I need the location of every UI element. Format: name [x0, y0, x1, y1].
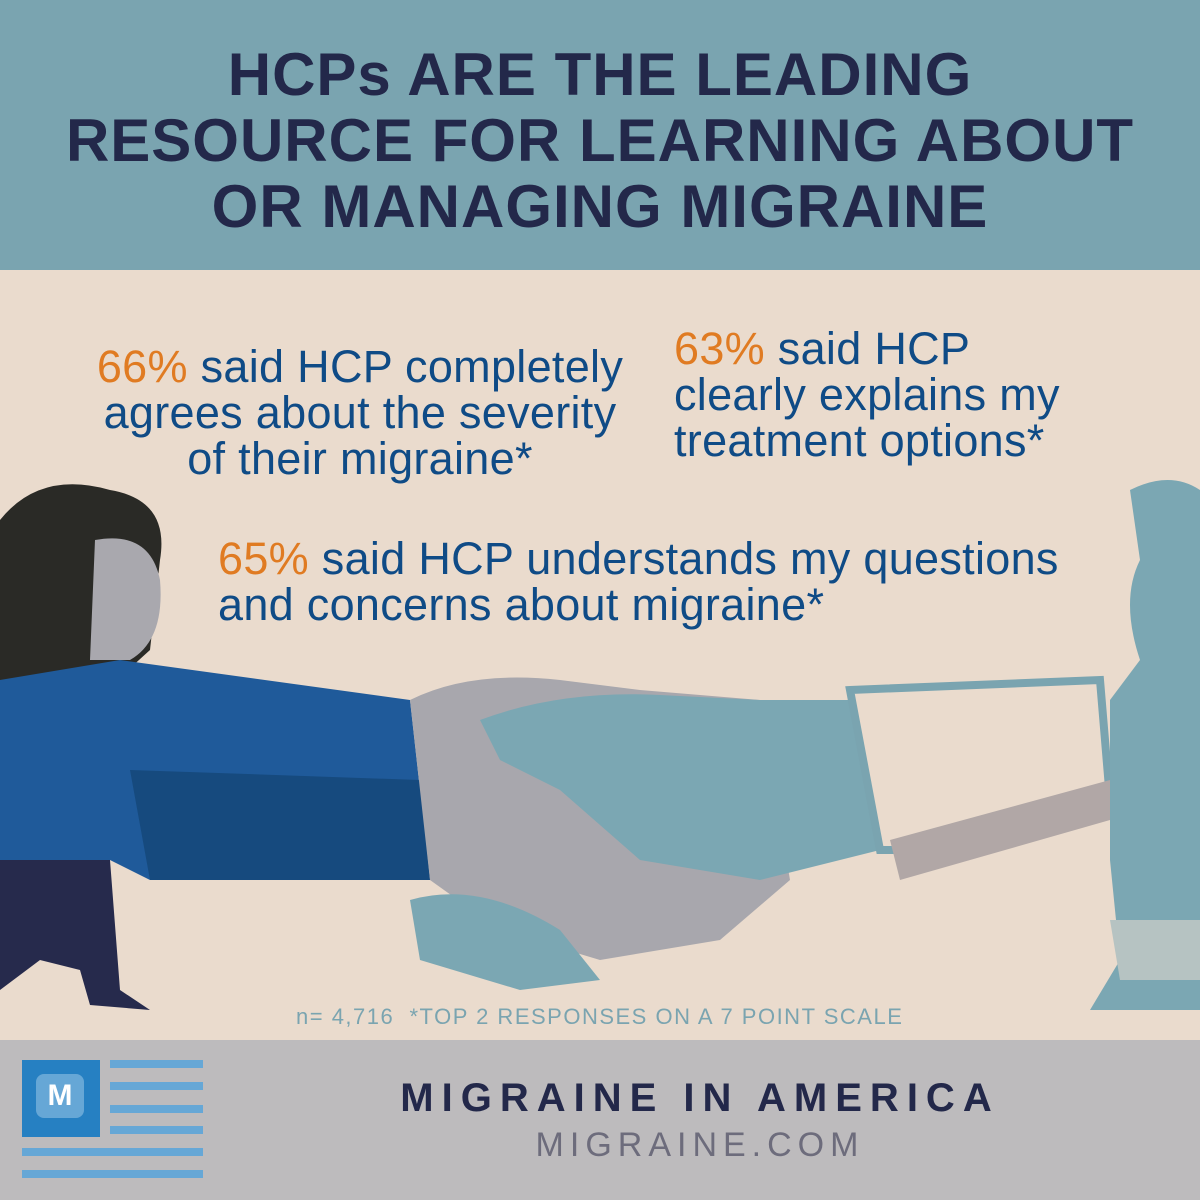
stat 65%: and concerns about migraine* — [218, 579, 824, 630]
handshake hands — [410, 678, 1110, 990]
footer title: MIGRAINE IN AMERICA — [400, 1076, 1000, 1120]
title: HCPs ARE THE LEADING — [228, 41, 972, 108]
footer — [0, 1040, 1200, 1200]
illustration: handshake — [0, 480, 1200, 1010]
stat 66%: of their migraine* — [187, 433, 533, 484]
header band — [0, 0, 1200, 270]
title: OR MANAGING MIGRAINE — [212, 173, 988, 240]
stat 63%: 63% said HCP — [674, 323, 970, 374]
footer url: MIGRAINE.COM — [536, 1126, 864, 1164]
title: RESOURCE FOR LEARNING ABOUT — [66, 107, 1134, 174]
logo: flag: M — [48, 1079, 72, 1112]
stat 66% — [97, 341, 623, 484]
stat 65%: 65% said HCP understands my questions — [218, 533, 1059, 584]
title — [66, 41, 1134, 240]
stat 66%: 66% said HCP completely — [97, 341, 623, 392]
stat 65% — [218, 533, 1059, 630]
logo: flag — [22, 1060, 203, 1178]
stat 63%: clearly explains my — [674, 369, 1060, 420]
doctor — [1090, 480, 1200, 1010]
woman — [0, 484, 430, 1010]
stat 66%: agrees about the severity — [104, 387, 616, 438]
stat 63%: treatment options* — [674, 415, 1045, 466]
stat 63% — [674, 323, 1060, 466]
footnote: n= 4,716 *TOP 2 RESPONSES ON A 7 POINT SCALE — [296, 1004, 903, 1029]
